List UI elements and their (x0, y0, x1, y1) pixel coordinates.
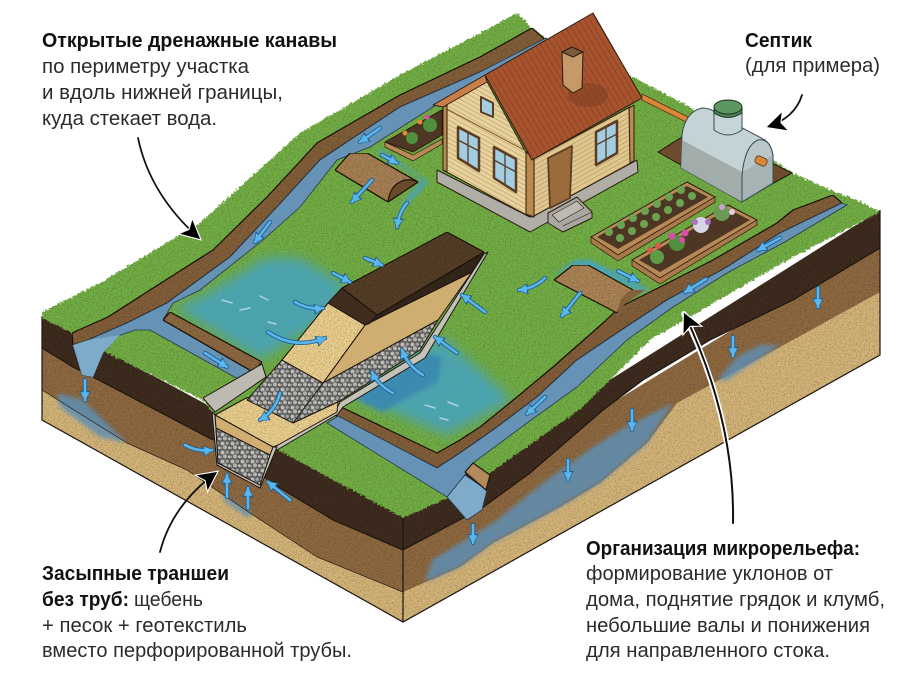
gable window (481, 97, 493, 117)
text block: backfill trenches (42, 562, 352, 662)
soil side face (365, 252, 484, 325)
window left 2 (494, 147, 516, 192)
ponded water: right basin (353, 337, 513, 435)
layer: sand (42, 270, 880, 622)
trench section gravel (216, 428, 270, 485)
trench section sand (215, 415, 273, 455)
berm right with swale (552, 260, 650, 313)
text block: microrelief: формирование уклонов от (586, 562, 834, 585)
window right (596, 121, 617, 165)
ponded water: left basin (175, 258, 345, 360)
soil cap top (342, 232, 484, 315)
raised bed: flowers (632, 204, 757, 284)
geotextile lining right side (273, 252, 488, 450)
berm left with swale (335, 150, 428, 206)
soil cap front (328, 288, 377, 325)
raised bed: top-left flowers (385, 110, 442, 161)
water streaks in basins (222, 296, 458, 420)
trench gravel top (247, 360, 323, 423)
inner ditch wall (163, 312, 262, 372)
callout arrow: microrelief (684, 313, 733, 523)
chimney shadow on roof (568, 83, 608, 107)
gravel side face (293, 320, 438, 423)
orange outlet stub (754, 155, 768, 167)
right ditch: soil wall (335, 195, 842, 468)
soil layer outlines (42, 210, 880, 622)
tank end arch (742, 140, 773, 202)
roof eave (433, 75, 487, 107)
text block: backfill trenches: без труб: (42, 588, 129, 611)
layer: dark topsoil (42, 210, 880, 550)
excavation pit (658, 127, 792, 200)
roof (485, 13, 642, 160)
text block: open ditches (42, 29, 337, 130)
chimney (562, 48, 583, 93)
left cut water face (73, 335, 120, 377)
text block: backfill trenches: + песок + геотекстиль (42, 614, 247, 637)
back ditch: soil wall (72, 28, 548, 345)
text block: septic: (для примера) (745, 54, 880, 77)
soil block cross-section (42, 210, 880, 622)
text block: septic (745, 29, 880, 77)
door (548, 146, 572, 208)
geotextile flap (203, 364, 266, 412)
trench sand top near (215, 397, 338, 447)
text block: backfill trenches: щебень (134, 588, 203, 611)
green lid (714, 100, 742, 118)
side wall (532, 107, 633, 217)
text block: backfill trenches: Засыпные траншеи (42, 562, 229, 585)
soil wedge at ditch end (465, 463, 490, 490)
corner posts (526, 152, 534, 217)
back ditch: water (73, 38, 552, 380)
trench front section lining (212, 412, 277, 488)
layer: brown subsoil (42, 240, 880, 592)
gable wall (443, 78, 530, 217)
window left 1 (458, 127, 479, 171)
grass top surface (42, 13, 880, 518)
text block: backfill trenches: вместо перфорированной трубы. (42, 639, 352, 662)
riser neck (714, 110, 742, 135)
outflow pipe from house (642, 94, 688, 122)
left corner post (443, 105, 447, 172)
right cut water face (447, 475, 487, 520)
house (433, 13, 642, 232)
septic tank (642, 94, 792, 202)
text block: open ditches: и вдоль нижней границы, (42, 81, 283, 104)
text block: microrelief: Организация микрорельефа: (586, 537, 860, 560)
text block: microrelief (586, 537, 885, 662)
callout arrow: trench (160, 472, 217, 552)
tank liquid level (681, 140, 773, 202)
text block: open ditches: куда стекает вода. (42, 107, 217, 130)
gable trim line (443, 107, 528, 152)
callout arrow: open ditches (138, 138, 200, 239)
text block: microrelief: дома, поднятие грядок и клумб, (586, 588, 885, 611)
text block: septic: Септик (745, 29, 813, 52)
drainage trench (203, 232, 488, 488)
raised bed: vegetables (591, 182, 715, 261)
callout arrow: septic (767, 95, 802, 127)
sand side face (323, 272, 472, 383)
right ditch: water (327, 203, 847, 497)
text block: open ditches: Открытые дренажные канавы (42, 29, 337, 52)
blue flow arrows (85, 128, 818, 543)
translucent tank body (681, 108, 773, 202)
text block: open ditches: по периметру участка (42, 55, 250, 78)
text block: microrelief: небольшие валы и понижения (586, 614, 870, 637)
water seeping into subsoil (57, 345, 780, 582)
right corner post (629, 105, 634, 163)
trench sand slope (282, 303, 365, 383)
chimney cap (562, 47, 583, 57)
foundation (437, 160, 638, 232)
text block: microrelief: для направленного стока. (586, 639, 830, 662)
porch steps (548, 197, 592, 232)
